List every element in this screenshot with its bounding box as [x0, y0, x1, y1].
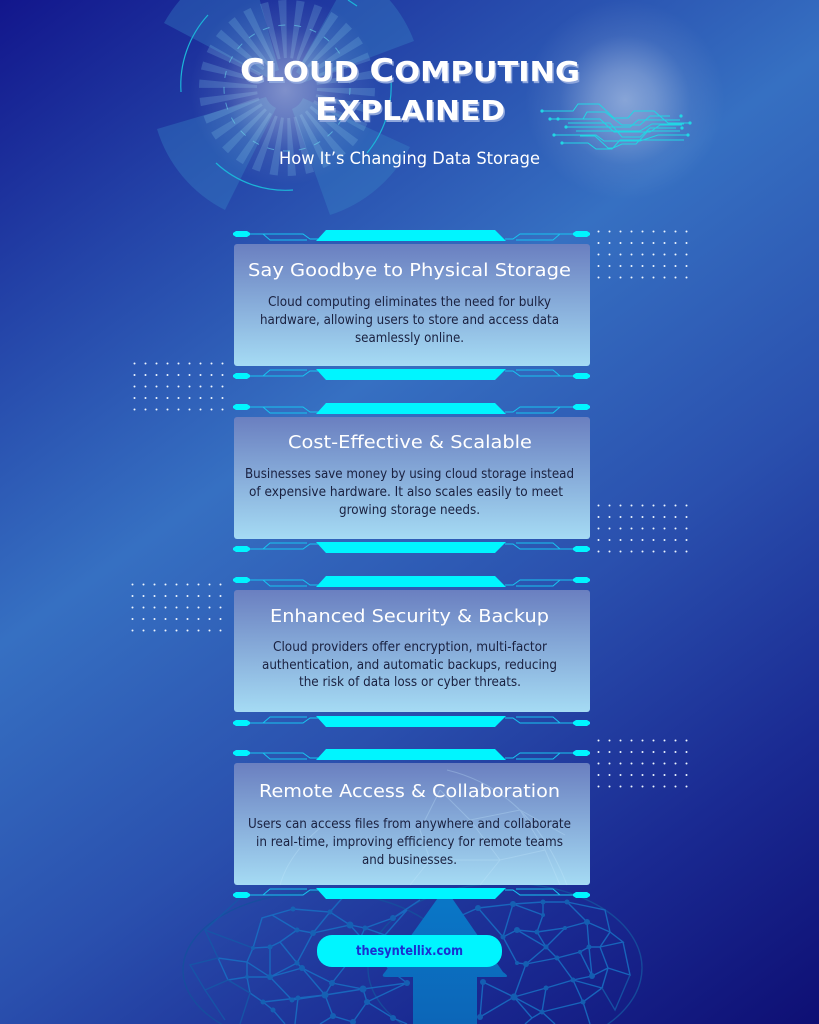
card 3 body: authentication, and automatic backups, reducing: [262, 658, 557, 673]
card 2: cost-effective and scalable: [233, 403, 590, 553]
card 4 body: and businesses.: [362, 853, 457, 868]
dot grid left upper: [133, 362, 225, 412]
title: [240, 53, 580, 128]
card 3: enhanced security and backup: [233, 576, 590, 727]
radial tech burst decoration: [157, 0, 414, 215]
card 2 heading: Cost-Effective & Scalable: [288, 433, 532, 453]
card 1: say goodbye to physical storage: [233, 230, 590, 380]
card 4 network overlay: [280, 770, 567, 885]
glow behind circuit: [525, 0, 725, 200]
network globe illustration: [183, 883, 642, 1024]
card 1 body: [260, 295, 559, 346]
card 1 body: seamlessly online.: [355, 331, 464, 346]
card 3 body: the risk of data loss or cyber threats.: [299, 675, 521, 690]
title: CLOUD COMPUTING: [240, 53, 580, 89]
card 2 body: Businesses save money by using cloud storage instead: [245, 467, 574, 482]
dot grid right middle: [597, 504, 689, 554]
card 2 body: growing storage needs.: [339, 503, 480, 518]
card 4 body: [248, 817, 571, 868]
dot grid left lower: [131, 583, 223, 633]
card 1 body: Cloud computing eliminates the need for bulky: [268, 295, 551, 310]
website button: [317, 935, 502, 967]
dot grid right lower: [597, 739, 689, 789]
card 4 heading: Remote Access & Collaboration: [259, 782, 560, 802]
card 2 body: of expensive hardware. It also scales easily to meet: [249, 485, 563, 500]
card 4 body: Users can access files from anywhere and collaborate: [248, 817, 571, 832]
icon: upward arrow: [383, 888, 507, 1024]
icon: circuit lines: [540, 104, 692, 149]
card 1 body: hardware, allowing users to store and access data: [260, 313, 559, 328]
card 3 body: Cloud providers offer encryption, multi-factor: [273, 640, 548, 655]
card 1 heading: Say Goodbye to Physical Storage: [248, 261, 571, 281]
card 4: remote access and collaboration: [233, 749, 590, 899]
card 2 body: [245, 467, 574, 518]
dot grid top right: [597, 230, 689, 280]
title: EXPLAINED: [315, 92, 505, 128]
card 4 body: in real-time, improving efficiency for remote teams: [256, 835, 563, 850]
website button: thesyntellix.com: [356, 944, 463, 959]
card 3 heading: Enhanced Security & Backup: [270, 607, 549, 627]
subtitle: How It’s Changing Data Storage: [279, 149, 540, 169]
card 3 body: [262, 640, 557, 690]
